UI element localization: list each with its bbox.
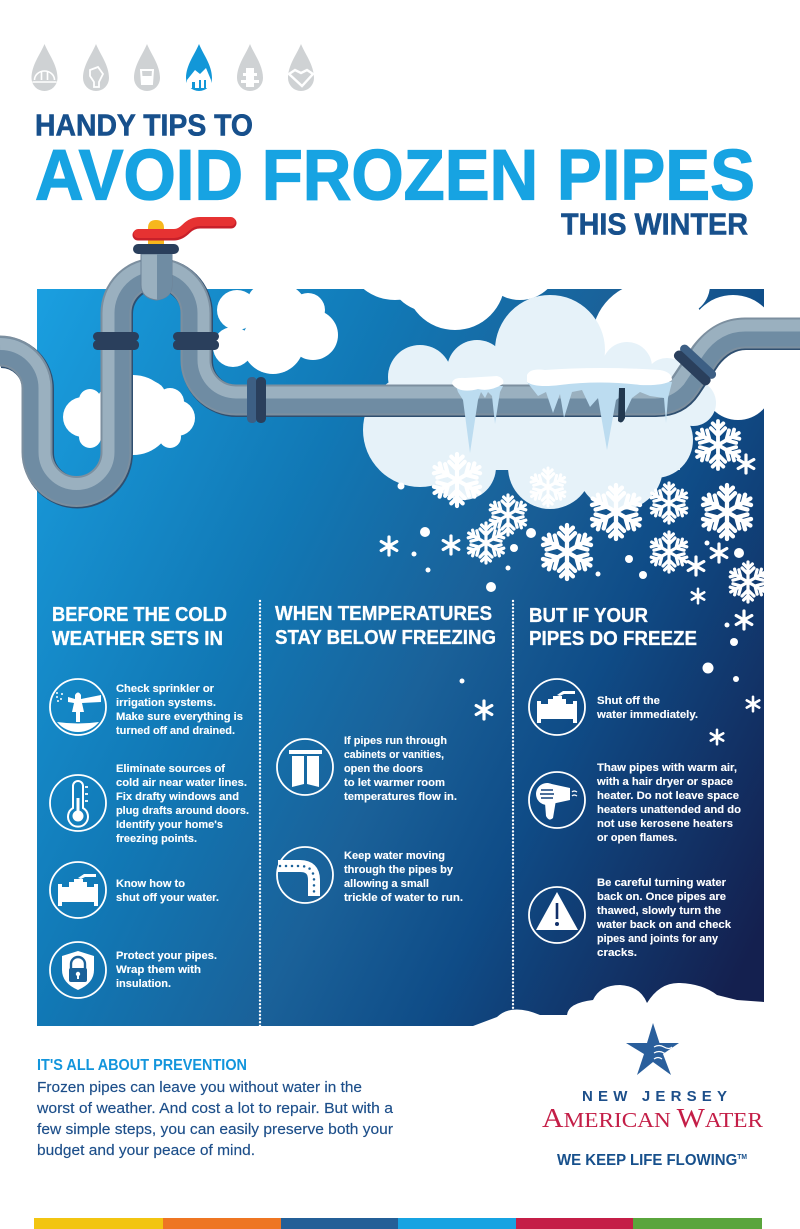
ice and snow on pipe xyxy=(452,368,672,453)
text: thaw: heater. Do not leave space xyxy=(597,790,739,802)
logo: new jersey: NEW JERSEY xyxy=(582,1088,727,1105)
logo: tagline: WE KEEP LIFE FLOWING xyxy=(557,1152,744,1169)
cloud: upper right white mass xyxy=(364,289,764,420)
heading line: this winter: THIS WINTER xyxy=(561,206,748,242)
prevention body: few simple steps, you can easily preserve both your xyxy=(37,1121,393,1138)
text: trickle: Keep water moving xyxy=(344,850,445,862)
text: shut off: Know how to xyxy=(116,878,185,890)
logo: tagline: TM xyxy=(737,1154,747,1161)
icicles left xyxy=(456,386,503,453)
icon: trickling pipe xyxy=(277,847,333,903)
text: thaw xyxy=(596,762,741,844)
text: insulation: Wrap them with xyxy=(116,964,201,976)
icon: hard hat drop xyxy=(32,44,58,91)
text: careful xyxy=(596,877,732,959)
icon: water glass drop xyxy=(134,44,160,91)
prevention body: Frozen pipes can leave you without water in the xyxy=(37,1079,362,1096)
text: cold air: cold air near water lines. xyxy=(116,777,247,789)
snowflakes and snow dots xyxy=(381,421,768,744)
column heading: PIPES DO FREEZE xyxy=(529,627,697,650)
text: trickle: through the pipes by xyxy=(344,864,454,876)
cloud: behind arch xyxy=(213,283,338,374)
text: cold air: Identify your home's xyxy=(116,819,223,831)
text: sprinkler: turned off and drained. xyxy=(116,725,235,737)
bottom white cloud edge xyxy=(473,983,764,1040)
coupling left xyxy=(93,332,139,350)
text: thaw: Thaw pipes with warm air, xyxy=(597,762,737,774)
valve body xyxy=(141,254,172,300)
text: shut off xyxy=(596,695,698,721)
white clouds xyxy=(63,289,764,455)
snow cap left xyxy=(452,376,503,391)
text: insulation: insulation. xyxy=(116,978,171,990)
icon: sprinkler xyxy=(50,679,106,735)
text: cold air: Eliminate sources of xyxy=(116,763,225,775)
logo: new jersey american water xyxy=(542,1023,763,1169)
text: trickle: trickle of water to run. xyxy=(344,892,463,904)
icon: shut off valve xyxy=(529,679,585,735)
column heading xyxy=(52,603,227,650)
text: careful: cracks. xyxy=(597,947,637,959)
coupling diagonal xyxy=(672,343,718,387)
coupling right xyxy=(173,332,219,350)
text: cabinets: temperatures flow in. xyxy=(344,791,457,803)
logo: american water: AMERICAN WATER xyxy=(542,1103,763,1133)
column: before the cold weather sets in xyxy=(50,603,249,998)
text: sprinkler: Check sprinkler or xyxy=(116,683,215,695)
text: thaw: with a hair dryer or space xyxy=(596,776,733,788)
icon: light bulb drop xyxy=(83,44,109,91)
heading line: avoid frozen pipes: AVOID FROZEN PIPES xyxy=(35,136,755,216)
text: insulation xyxy=(116,950,217,990)
prevention body: worst of weather. And cost a lot to repair. But with a xyxy=(36,1100,394,1117)
dark valve cap xyxy=(133,244,179,254)
text: careful: back on. Once pipes are xyxy=(597,891,726,903)
text: insulation: Protect your pipes. xyxy=(116,950,217,962)
icon: open cabinet xyxy=(277,739,333,795)
column heading xyxy=(275,602,496,649)
text: cabinets: to let warmer room xyxy=(344,777,445,789)
text: cabinets: cabinets or vanities, xyxy=(344,749,444,761)
snow cap right xyxy=(527,368,672,386)
column heading: STAY BELOW FREEZING xyxy=(275,626,496,649)
text: cabinets: open the doors xyxy=(344,763,423,775)
text: cabinets: If pipes run through xyxy=(344,735,447,747)
text: thaw: or open flames. xyxy=(597,832,677,844)
coupling horizontal pipe xyxy=(247,377,266,423)
column heading: BUT IF YOUR xyxy=(529,604,648,627)
text: careful: Be careful turning water xyxy=(597,877,727,889)
dotted column dividers xyxy=(260,601,513,1026)
logo star with waves xyxy=(626,1023,679,1075)
icon: shut off valve xyxy=(50,862,106,918)
pipe couplings xyxy=(93,332,718,423)
pipe run xyxy=(0,266,800,492)
text: trickle xyxy=(344,850,463,904)
text: shut off: Shut off the xyxy=(597,695,660,707)
column heading xyxy=(529,604,697,650)
text: careful: water back on and check xyxy=(596,919,732,931)
text: trickle: allowing a small xyxy=(344,878,429,890)
text: shut off xyxy=(116,878,219,904)
cloud: behind left pipe xyxy=(63,375,195,455)
icon: hair dryer xyxy=(529,772,585,828)
column heading: WEATHER SETS IN xyxy=(52,627,223,650)
icon: handshake drop xyxy=(288,44,314,91)
text: sprinkler: irrigation systems. xyxy=(116,697,216,709)
title xyxy=(35,108,755,242)
text: sprinkler xyxy=(116,683,243,737)
text: shut off: shut off your water. xyxy=(116,892,219,904)
heading line: handy tips to: HANDY TIPS TO xyxy=(35,108,253,142)
prevention body xyxy=(36,1079,394,1159)
dark drip xyxy=(618,388,625,422)
text block: prevention xyxy=(36,1057,394,1159)
icon: warning triangle xyxy=(529,887,585,943)
text: careful: pipes and joints for any xyxy=(597,933,719,945)
text: thaw: not use kerosene heaters xyxy=(597,818,733,830)
column: but if your pipes do freeze xyxy=(529,604,741,959)
row of water drop icons xyxy=(32,44,314,91)
colour bar footer xyxy=(34,1218,762,1229)
text: cold air xyxy=(116,763,249,845)
text: shut off: water immediately. xyxy=(596,709,698,721)
prevention heading: IT'S ALL ABOUT PREVENTION xyxy=(37,1057,247,1074)
text: cold air: freezing points. xyxy=(116,833,197,845)
cloud: pale frost cloud xyxy=(363,295,716,510)
column heading: WHEN TEMPERATURES xyxy=(275,602,492,625)
icon: shield lock xyxy=(50,942,106,998)
valve xyxy=(133,220,231,300)
text: cabinets xyxy=(344,735,457,803)
text: cold air: plug drafts around doors. xyxy=(116,805,249,817)
column: when temperatures stay below freezing xyxy=(275,602,496,904)
text: sprinkler: Make sure everything is xyxy=(116,711,243,723)
text: careful: thawed, slowly turn the xyxy=(597,905,721,917)
panel: blue gradient background xyxy=(37,289,764,1026)
icicles right xyxy=(527,382,672,450)
text: cold air: Fix drafty windows and xyxy=(116,791,239,803)
red handle xyxy=(138,222,231,235)
icon: house drop active xyxy=(186,44,212,91)
icon: thermometer xyxy=(50,775,106,831)
yellow stem xyxy=(148,220,164,245)
text: thaw: heaters unattended and do xyxy=(597,804,741,816)
column heading: BEFORE THE COLD xyxy=(52,603,227,626)
prevention body: budget and your peace of mind. xyxy=(37,1142,255,1159)
icon: hydrant drop xyxy=(237,44,263,91)
